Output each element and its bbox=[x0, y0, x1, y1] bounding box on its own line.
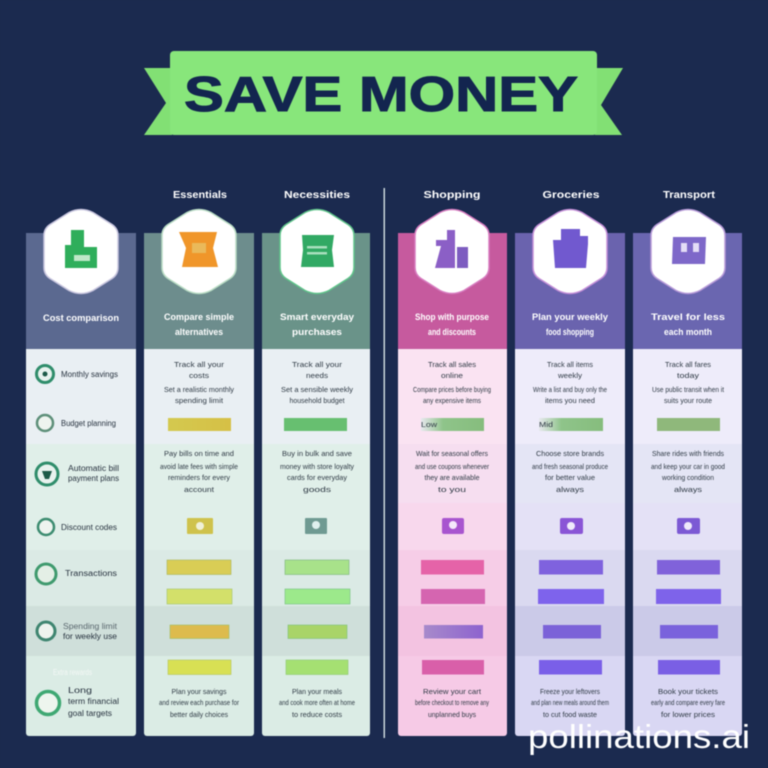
text block: Compare prices before buying bbox=[413, 385, 491, 394]
text block: for lower prices bbox=[661, 710, 715, 719]
text block: to you bbox=[438, 485, 466, 494]
text block: Use public transit when it bbox=[652, 385, 725, 394]
text block: reminders for every bbox=[168, 473, 230, 482]
text block: for better value bbox=[545, 473, 595, 482]
text block: Book your tickets bbox=[658, 687, 718, 696]
icon: small tag bbox=[560, 518, 583, 534]
text block: Review your cart bbox=[423, 687, 482, 696]
panel: column 4 pink bbox=[398, 210, 507, 736]
row label: long term goals: goal targets bbox=[68, 709, 112, 718]
header text bbox=[532, 312, 608, 337]
bars bbox=[285, 560, 350, 674]
row label: monthly savings bbox=[36, 366, 118, 382]
icon: hexagon badge bbox=[533, 210, 607, 294]
header text: Compare simple bbox=[164, 312, 234, 322]
icon: small tag bbox=[677, 518, 700, 534]
text block: before checkout to remove any bbox=[415, 698, 489, 707]
text block: any expensive items bbox=[423, 396, 481, 405]
text block: account bbox=[184, 485, 215, 494]
title ribbon banner bbox=[144, 51, 623, 135]
text block: cards for everyday bbox=[287, 473, 347, 482]
bar bbox=[539, 418, 603, 431]
header text: alternatives bbox=[175, 327, 223, 337]
text block: spending limit bbox=[175, 396, 224, 405]
icon: small tag bbox=[442, 518, 464, 534]
text block: Wait for seasonal offers bbox=[416, 449, 488, 458]
text block: Write a list and buy only the bbox=[533, 385, 607, 394]
text block bbox=[413, 360, 491, 405]
vertical divider bbox=[384, 188, 385, 738]
bar bbox=[421, 418, 484, 431]
text block bbox=[281, 360, 353, 405]
text block: needs bbox=[306, 371, 328, 380]
row label: spending limits: Spending limit bbox=[63, 622, 118, 631]
text block: and keep your car in good bbox=[651, 462, 725, 471]
text block: to reduce costs bbox=[292, 710, 342, 719]
text block: goods bbox=[303, 485, 331, 494]
column headings: Necessities bbox=[284, 190, 351, 201]
text block bbox=[531, 687, 609, 719]
text block: Track all fares bbox=[665, 360, 711, 369]
row label: automatic transfers: Automatic bill bbox=[68, 464, 119, 473]
row label: discount codes bbox=[38, 519, 117, 535]
row label: transactions: Transactions bbox=[65, 569, 117, 578]
column headings bbox=[173, 190, 716, 201]
text block: always bbox=[674, 485, 702, 494]
text block: household budget bbox=[290, 396, 345, 405]
row label: transactions bbox=[36, 564, 117, 584]
header text bbox=[651, 312, 725, 337]
row label: long term goals: Long bbox=[68, 686, 92, 695]
text block: weekly bbox=[557, 371, 582, 380]
text block: money with store loyalty bbox=[280, 462, 354, 471]
header text: and discounts bbox=[428, 327, 476, 337]
bars bbox=[656, 560, 721, 674]
text block bbox=[280, 449, 354, 494]
row label: automatic transfers: payment plans bbox=[68, 474, 119, 483]
text block: early and compare every fare bbox=[651, 698, 725, 707]
row label: spending limits: for weekly use bbox=[63, 632, 118, 641]
bars bbox=[538, 560, 604, 674]
text block: always bbox=[556, 485, 584, 494]
icon: hexagon badge bbox=[44, 210, 118, 294]
text block: costs bbox=[189, 371, 209, 380]
text block: Track all items bbox=[547, 360, 593, 369]
panel: row labels column bbox=[26, 210, 136, 736]
text block: and review each purchase for bbox=[159, 698, 239, 707]
text block: Pay bills on time and bbox=[164, 449, 234, 458]
text block: they are available bbox=[424, 473, 480, 482]
text block: Freeze your leftovers bbox=[540, 687, 600, 696]
title text: SAVE MONEY bbox=[184, 68, 578, 122]
icon: hexagon badge bbox=[415, 210, 489, 294]
icon: hexagon badge bbox=[280, 210, 354, 294]
header text: Smart everyday bbox=[280, 312, 354, 322]
text block: Share rides with friends bbox=[652, 449, 724, 458]
text block: suits your route bbox=[664, 396, 712, 405]
row label: long term goals: term financial bbox=[68, 697, 119, 706]
text block: to cut food waste bbox=[543, 710, 597, 719]
column headings: Shopping bbox=[424, 190, 480, 201]
text block: and use coupons whenever bbox=[415, 462, 489, 471]
bar bbox=[168, 418, 231, 431]
header text bbox=[164, 312, 234, 337]
text block: Track all your bbox=[174, 360, 225, 369]
text block: and fresh seasonal produce bbox=[532, 462, 608, 471]
text block bbox=[164, 360, 234, 405]
text block bbox=[533, 360, 607, 405]
column headings: Groceries bbox=[542, 190, 600, 201]
text block bbox=[160, 449, 238, 494]
bar bbox=[657, 418, 720, 431]
text block: Plan your savings bbox=[172, 687, 227, 696]
text block bbox=[651, 687, 725, 719]
header text: each month bbox=[664, 327, 712, 337]
panel: column 5 violet bbox=[515, 210, 625, 736]
text block: Buy in bulk and save bbox=[282, 449, 352, 458]
icon: small tag bbox=[187, 518, 213, 534]
header text bbox=[280, 312, 354, 337]
icon: hexagon badge bbox=[651, 210, 725, 294]
text block: unplanned buys bbox=[428, 710, 476, 719]
text block bbox=[651, 449, 725, 494]
text block bbox=[415, 687, 489, 719]
text block bbox=[279, 687, 355, 719]
row label: budget plan: Budget planning bbox=[61, 419, 116, 428]
text block bbox=[415, 449, 489, 494]
text block bbox=[652, 360, 725, 405]
row label: automatic transfers bbox=[36, 463, 119, 485]
column headings: Essentials bbox=[173, 190, 227, 201]
row label: long term goals bbox=[36, 686, 119, 718]
column headings: Transport bbox=[663, 190, 716, 201]
icon: small tag bbox=[305, 518, 327, 534]
text block: Track all sales bbox=[428, 360, 476, 369]
header text: purchases bbox=[292, 327, 342, 337]
header text: food shopping bbox=[546, 327, 594, 337]
row label: discount codes: Discount codes bbox=[61, 523, 117, 532]
row label: spending limits bbox=[37, 622, 118, 641]
text block: items you need bbox=[545, 396, 595, 405]
header text: Shop with purpose bbox=[415, 312, 489, 322]
text block: Set a realistic monthly bbox=[164, 385, 234, 394]
text block: and plan new meals around them bbox=[531, 698, 609, 707]
header text: Travel for less bbox=[651, 312, 725, 322]
text block: avoid late fees with simple bbox=[160, 462, 238, 471]
text block: Set a sensible weekly bbox=[281, 385, 353, 394]
header text: Plan your weekly bbox=[532, 312, 608, 322]
panel: column 2 yellow-green bbox=[144, 210, 254, 736]
text block bbox=[159, 687, 239, 719]
text block: Track all your bbox=[292, 360, 343, 369]
bar: Low bbox=[421, 420, 438, 429]
text block: and cook more often at home bbox=[279, 698, 355, 707]
row label: budget plan bbox=[37, 415, 116, 431]
watermark: pollinations.ai bbox=[528, 718, 750, 755]
icon: hexagon badge bbox=[162, 210, 236, 294]
panel: column 3 green bbox=[262, 210, 370, 736]
text block bbox=[532, 449, 608, 494]
bars bbox=[421, 560, 485, 674]
header text: Cost comparison bbox=[43, 313, 119, 323]
text block: online bbox=[441, 371, 463, 380]
bar bbox=[284, 418, 347, 431]
text block: Choose store brands bbox=[536, 449, 604, 458]
header text bbox=[415, 312, 489, 337]
text block: better daily choices bbox=[170, 710, 228, 719]
panel: column 6 violet bbox=[633, 210, 742, 736]
row label: rewards: Extra rewards bbox=[53, 668, 92, 677]
text block: today bbox=[677, 371, 699, 380]
text block: working condition bbox=[661, 473, 714, 482]
bar: Mid bbox=[539, 420, 553, 429]
bars bbox=[167, 560, 232, 674]
text block: Plan your meals bbox=[292, 687, 342, 696]
row label: monthly savings: Monthly savings bbox=[61, 370, 118, 379]
